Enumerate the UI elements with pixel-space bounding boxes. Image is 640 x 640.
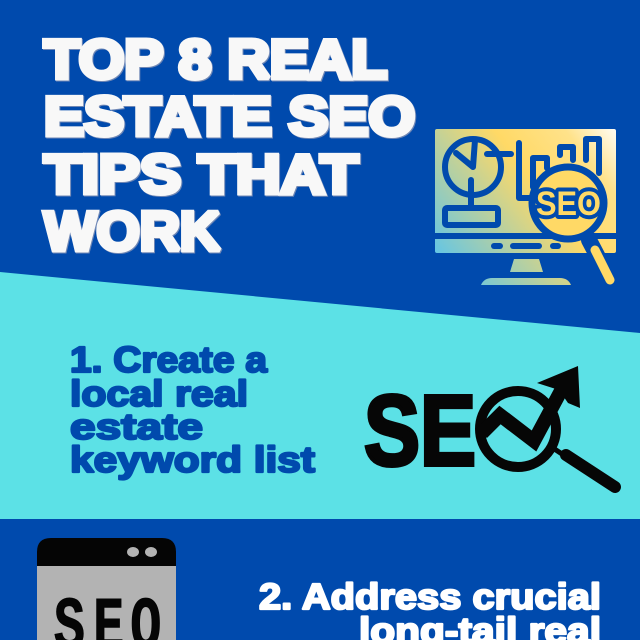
title: ESTATE SEO <box>44 85 415 147</box>
icon: browser window with SEO <box>37 538 176 640</box>
browser body <box>37 560 176 640</box>
browser window dots <box>127 547 157 557</box>
icon: black SEO logo with magnifier and arrow <box>364 366 615 487</box>
title: TOP 8 REAL <box>44 28 387 90</box>
icon label: SEO: SEO <box>536 185 601 223</box>
tip 1 heading <box>70 339 315 480</box>
tip 1 heading: keyword list <box>70 439 315 480</box>
logo letters: SE: SE <box>364 375 476 487</box>
tip 1 heading: estate <box>70 406 203 447</box>
title: TIPS THAT <box>44 143 358 205</box>
monitor buttons <box>494 243 558 249</box>
tip 1 heading: 1. Create a <box>70 339 268 380</box>
title <box>44 28 415 262</box>
logo magnifier handle <box>553 448 615 487</box>
icon: monitor screen <box>435 129 616 253</box>
icon: monitor with SEO magnifier <box>435 129 616 285</box>
icon: magnifier lens <box>532 167 604 239</box>
icon: magnifier handle <box>589 240 610 280</box>
logo arrow head <box>537 366 580 408</box>
tip 2 heading <box>259 576 601 640</box>
browser title bar <box>37 538 176 566</box>
tip 1 heading: local real <box>70 373 248 414</box>
icon: pie chart on stand <box>445 139 511 225</box>
screen divider <box>435 233 616 239</box>
icon: bar chart <box>519 139 599 198</box>
panel: cyan diagonal band <box>0 272 640 519</box>
logo magnifier ring <box>480 391 556 467</box>
icon: monitor stand <box>510 259 543 272</box>
tip 2 heading: 2. Address crucial <box>259 576 601 617</box>
icon: monitor base <box>481 278 571 285</box>
title: WORK <box>44 200 220 262</box>
logo trend line <box>482 387 563 441</box>
